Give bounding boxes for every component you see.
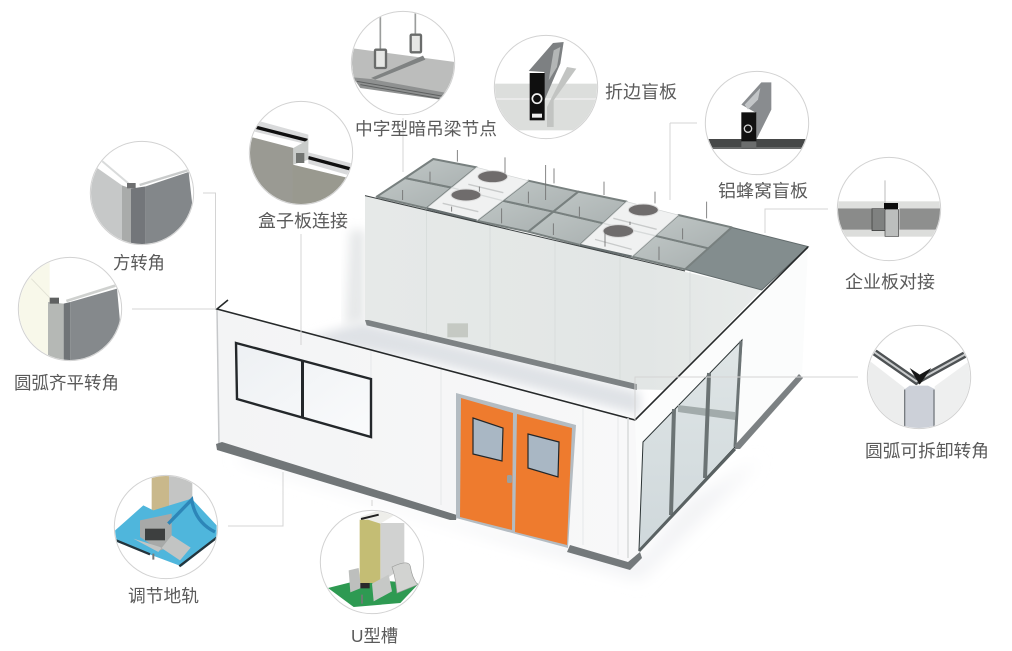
door handle — [507, 475, 512, 483]
upper clean room — [365, 150, 808, 390]
callout: 盒子板连接 — [248, 101, 353, 231]
label: 圆弧可拆卸转角 — [865, 441, 989, 461]
right door leaf — [515, 414, 572, 545]
leader lines — [132, 118, 858, 526]
icon: adjustable floor rail — [113, 475, 218, 579]
right skirting segment — [567, 545, 642, 570]
left door window — [473, 418, 503, 461]
back wall skirting — [365, 320, 637, 390]
fan filter units — [427, 167, 678, 257]
callout: 圆弧齐平转角 — [14, 257, 124, 393]
icon: square corner — [89, 141, 197, 247]
back wall with panel seams — [365, 196, 762, 390]
callout: 调节地轨 — [113, 475, 218, 606]
icon: ceiling beam node — [350, 11, 455, 115]
inner floor shadow behind skirting — [300, 230, 640, 415]
door frame — [456, 393, 576, 548]
label: 企业板对接 — [845, 272, 935, 292]
window — [236, 343, 371, 437]
right skirting — [735, 374, 803, 449]
icon: folded blind panel — [494, 35, 600, 139]
front wall top edge — [217, 300, 635, 420]
callout: 企业板对接 — [834, 157, 944, 292]
icon: U-shaped channel — [320, 510, 424, 614]
cleanroom building — [216, 150, 808, 580]
icon: aluminium honeycomb panel — [703, 71, 810, 175]
label: 折边盲板 — [605, 82, 677, 102]
right wall top edge — [635, 247, 808, 420]
icon: panel butt joint — [834, 157, 944, 261]
floor shadow — [240, 452, 760, 580]
right wall — [635, 247, 808, 552]
grey ceiling panel — [685, 227, 808, 290]
right door window — [528, 434, 559, 477]
label: 方转角 — [113, 253, 165, 273]
label: 盒子板连接 — [258, 211, 348, 231]
label: 调节地轨 — [128, 586, 199, 606]
reflection of inner skirting — [678, 405, 735, 420]
front wall — [217, 309, 640, 564]
icon: box panel connection — [248, 101, 353, 206]
label: U型槽 — [351, 626, 398, 646]
double door — [456, 393, 576, 548]
glass wall — [639, 340, 742, 551]
label: 中字型暗吊梁节点 — [355, 119, 497, 139]
wall top edge — [365, 196, 685, 271]
callout: 圆弧可拆卸转角 — [865, 325, 989, 461]
ceiling glass modules — [377, 159, 732, 269]
hanging rods — [403, 150, 707, 260]
icon: removable rounded corner — [867, 325, 971, 433]
icon: flush rounded corner — [16, 257, 124, 364]
callout: 铝蜂窝盲板 — [703, 71, 810, 201]
callout: 方转角 — [89, 141, 197, 273]
left door leaf — [460, 398, 513, 530]
callout: 折边盲板 — [494, 35, 677, 139]
front skirting — [216, 442, 457, 520]
callout: 中字型暗吊梁节点 — [350, 11, 497, 139]
callout: U型槽 — [320, 510, 424, 646]
label: 圆弧齐平转角 — [14, 373, 119, 393]
label: 铝蜂窝盲板 — [718, 181, 808, 201]
